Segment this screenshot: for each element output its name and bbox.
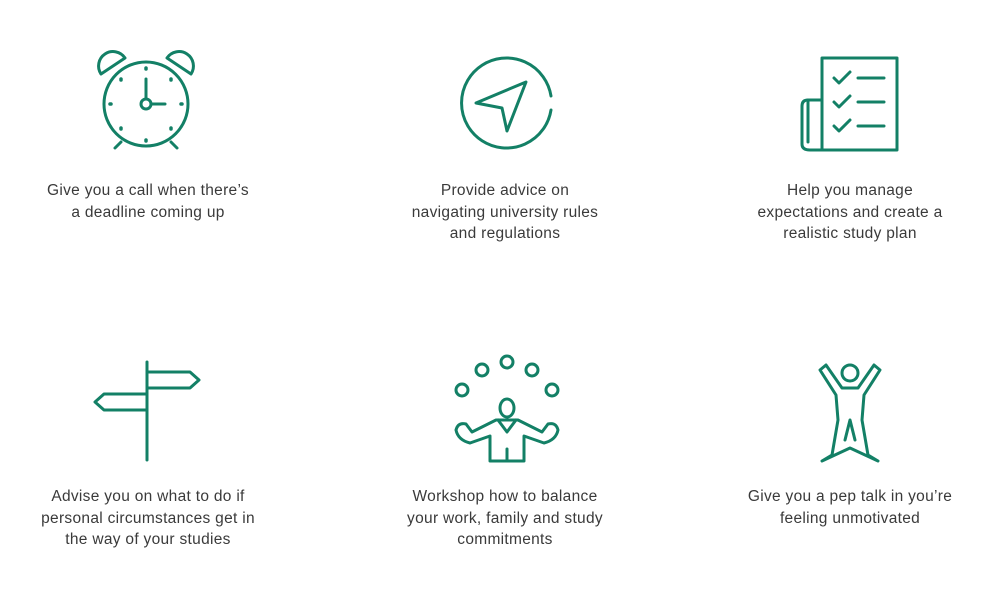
text: study plan: expectations and create a xyxy=(757,204,942,220)
text: personal circumstances xyxy=(41,488,255,548)
text: deadline call: Give you a call when there’s xyxy=(47,182,249,199)
text: balance commitments: Workshop how to balance xyxy=(413,488,597,505)
text: personal circumstances: Advise you on what to do if xyxy=(51,488,245,505)
text: university rules xyxy=(412,182,598,242)
icon: signpost xyxy=(95,362,199,460)
icon: compass navigation xyxy=(462,58,551,148)
text: study plan: realistic study plan xyxy=(783,225,917,242)
text: deadline call xyxy=(47,182,249,220)
text: balance commitments: your work, family and study xyxy=(407,510,603,526)
text: balance commitments: commitments xyxy=(457,531,553,548)
icon: person cheering xyxy=(820,365,880,461)
text: pep talk xyxy=(748,488,952,526)
text: pep talk: Give you a pep talk in you’re xyxy=(748,488,952,505)
text: university rules: and regulations xyxy=(450,225,560,242)
icon: checklist xyxy=(802,58,897,150)
text: study plan: Help you manage xyxy=(787,182,913,199)
text: deadline call: a deadline coming up xyxy=(71,204,225,220)
text: balance commitments xyxy=(407,488,603,548)
text: study plan xyxy=(757,182,942,242)
text: university rules: navigating university rules xyxy=(412,204,598,220)
text: pep talk: feeling unmotivated xyxy=(780,510,920,526)
text: university rules: Provide advice on xyxy=(441,182,569,199)
text: personal circumstances: personal circumstances get in xyxy=(41,510,255,526)
icon: alarm clock xyxy=(99,52,193,148)
text: personal circumstances: the way of your studies xyxy=(65,531,231,548)
icon: juggler xyxy=(456,356,558,461)
